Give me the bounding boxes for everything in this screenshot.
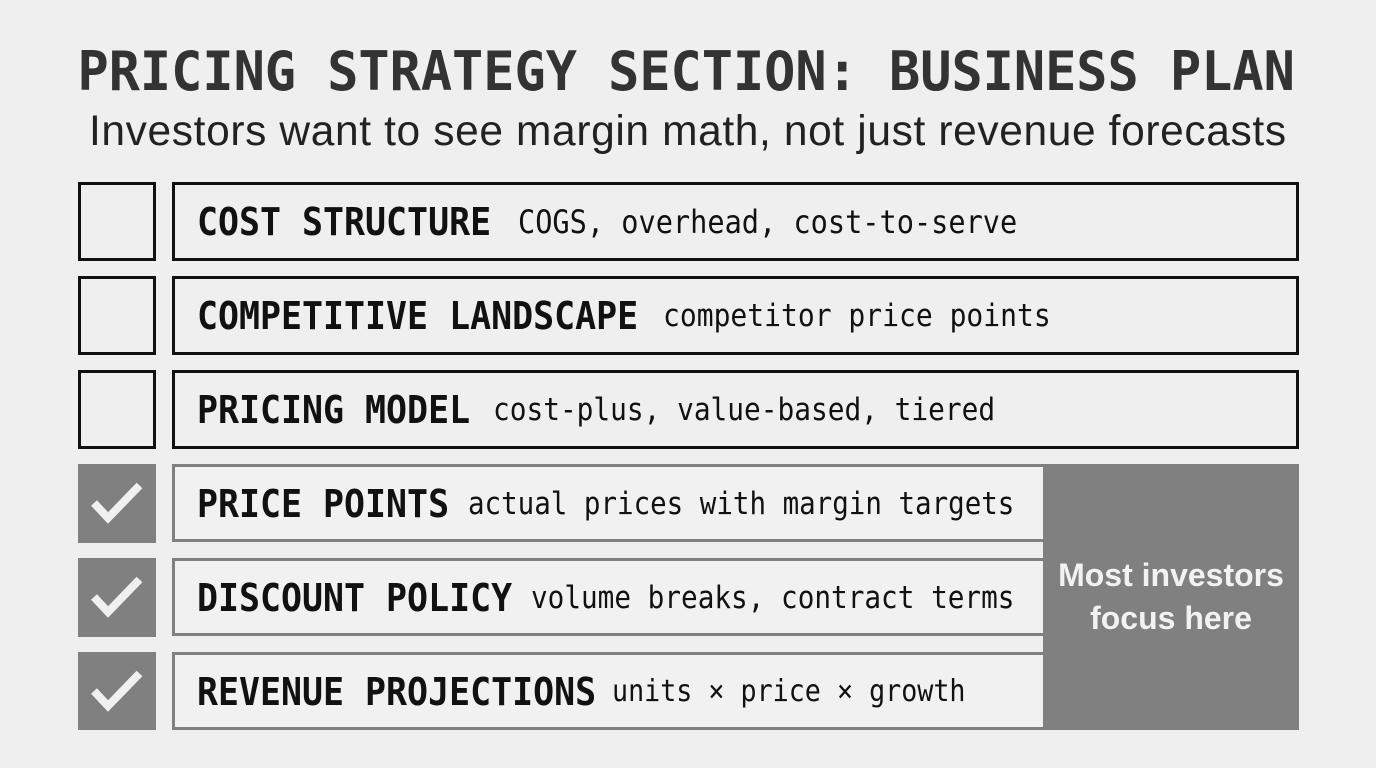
row: competitive landscape: competitor price points [663, 297, 1051, 334]
row: cost structure [172, 182, 1299, 261]
title: PRICING STRATEGY SECTION: BUSINESS PLAN [78, 40, 1295, 104]
row: discount policy: DISCOUNT POLICY [197, 577, 512, 621]
row: price points [172, 464, 1043, 542]
row: competitive landscape: COMPETITIVE LANDSCAPE [197, 295, 638, 339]
row: competitive landscape [172, 276, 1299, 355]
callout: most investors focus here: Most investors [1058, 557, 1284, 593]
row: pricing model: PRICING MODEL [197, 389, 470, 433]
row: discount policy: volume breaks, contract terms [531, 579, 1014, 616]
row: price points: PRICE POINTS [197, 483, 449, 527]
callout: most investors focus here [1043, 464, 1299, 730]
row: revenue projections: units × price × growth [612, 674, 965, 709]
row: cost structure: COST STRUCTURE [197, 201, 491, 245]
checkbox: pricing model [78, 370, 156, 449]
row: pricing model [172, 370, 1299, 449]
row: pricing model: cost-plus, value-based, tiered [493, 391, 995, 428]
checked box: discount policy [78, 558, 156, 637]
checkbox: cost structure [78, 182, 156, 261]
checked box: revenue projections [78, 652, 156, 730]
row: revenue projections: REVENUE PROJECTIONS [197, 671, 596, 715]
row: cost structure: COGS, overhead, cost-to-serve [518, 203, 1017, 241]
row: revenue projections [172, 652, 1043, 730]
row: price points: actual prices with margin targets [468, 486, 1014, 522]
checked box: price points [78, 464, 156, 543]
checkbox: competitive landscape [78, 276, 156, 355]
callout: most investors focus here: focus here [1090, 600, 1252, 636]
subtitle: Investors want to see margin math, not just revenue forecasts [89, 108, 1287, 155]
row: discount policy [172, 558, 1043, 636]
